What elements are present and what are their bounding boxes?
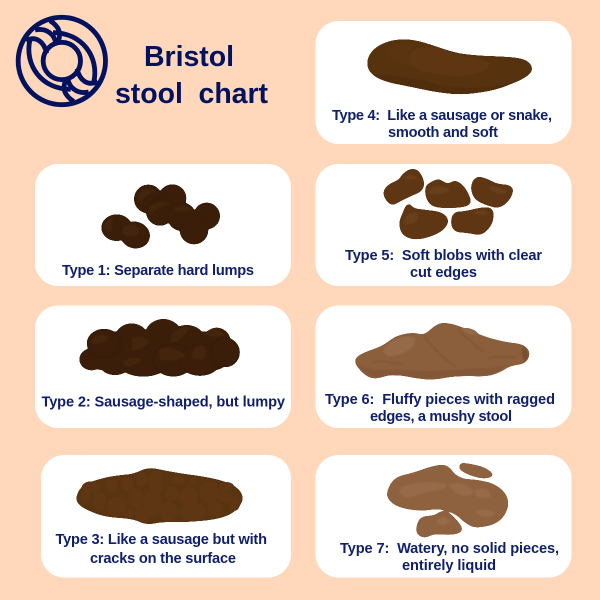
label: type 2: Type 2: Sausage-shaped, but lumpy — [42, 394, 286, 410]
label: type 4: smooth and soft — [388, 125, 498, 141]
panel: type 3 — [41, 455, 291, 578]
icon: type 5 stool, soft blobs — [385, 170, 511, 238]
icon: type 4 stool, smooth sausage — [367, 39, 532, 94]
label: type 6: Type 6: Fluffy pieces with ragged — [325, 392, 555, 408]
title — [115, 41, 268, 110]
label: type 3: cracks on the surface — [90, 551, 236, 567]
label: type 3 — [56, 532, 267, 567]
icon: type 7 stool, watery puddles — [388, 463, 507, 536]
title: Bristol — [144, 41, 234, 73]
panel: type 4 — [316, 21, 572, 144]
panel: type 7 — [316, 455, 572, 578]
label: type 7 — [340, 541, 559, 574]
icon: type 3 stool, cracked sausage — [77, 469, 242, 523]
label: type 5 — [345, 248, 542, 281]
label: type 5: Type 5: Soft blobs with clear — [345, 248, 542, 264]
panel: type 6 — [316, 306, 572, 428]
label: type 4: Type 4: Like a sausage or snake, — [332, 108, 552, 124]
label: type 6: edges, a mushy stool — [370, 409, 512, 425]
icon: type 6 stool, mushy ragged piece — [356, 324, 529, 379]
panel: type 5 — [316, 164, 572, 286]
panel: type 1 — [35, 164, 291, 286]
label: type 3: Type 3: Like a sausage but with — [56, 532, 267, 548]
label: type 1: Type 1: Separate hard lumps — [62, 263, 254, 279]
label: type 7: Type 7: Watery, no solid pieces, — [340, 541, 559, 557]
label: type 7: entirely liquid — [402, 558, 496, 574]
label: type 4 — [332, 108, 552, 141]
icon: type 1 stool, separate lumps — [102, 185, 220, 251]
panel: type 2 — [35, 306, 291, 428]
title: stool chart — [115, 78, 268, 110]
icon: type 2 stool, lumpy sausage — [79, 319, 239, 377]
logo: circular bowel icon — [18, 17, 105, 105]
label: type 5: cut edges — [410, 265, 477, 281]
label: type 6 — [325, 392, 555, 425]
